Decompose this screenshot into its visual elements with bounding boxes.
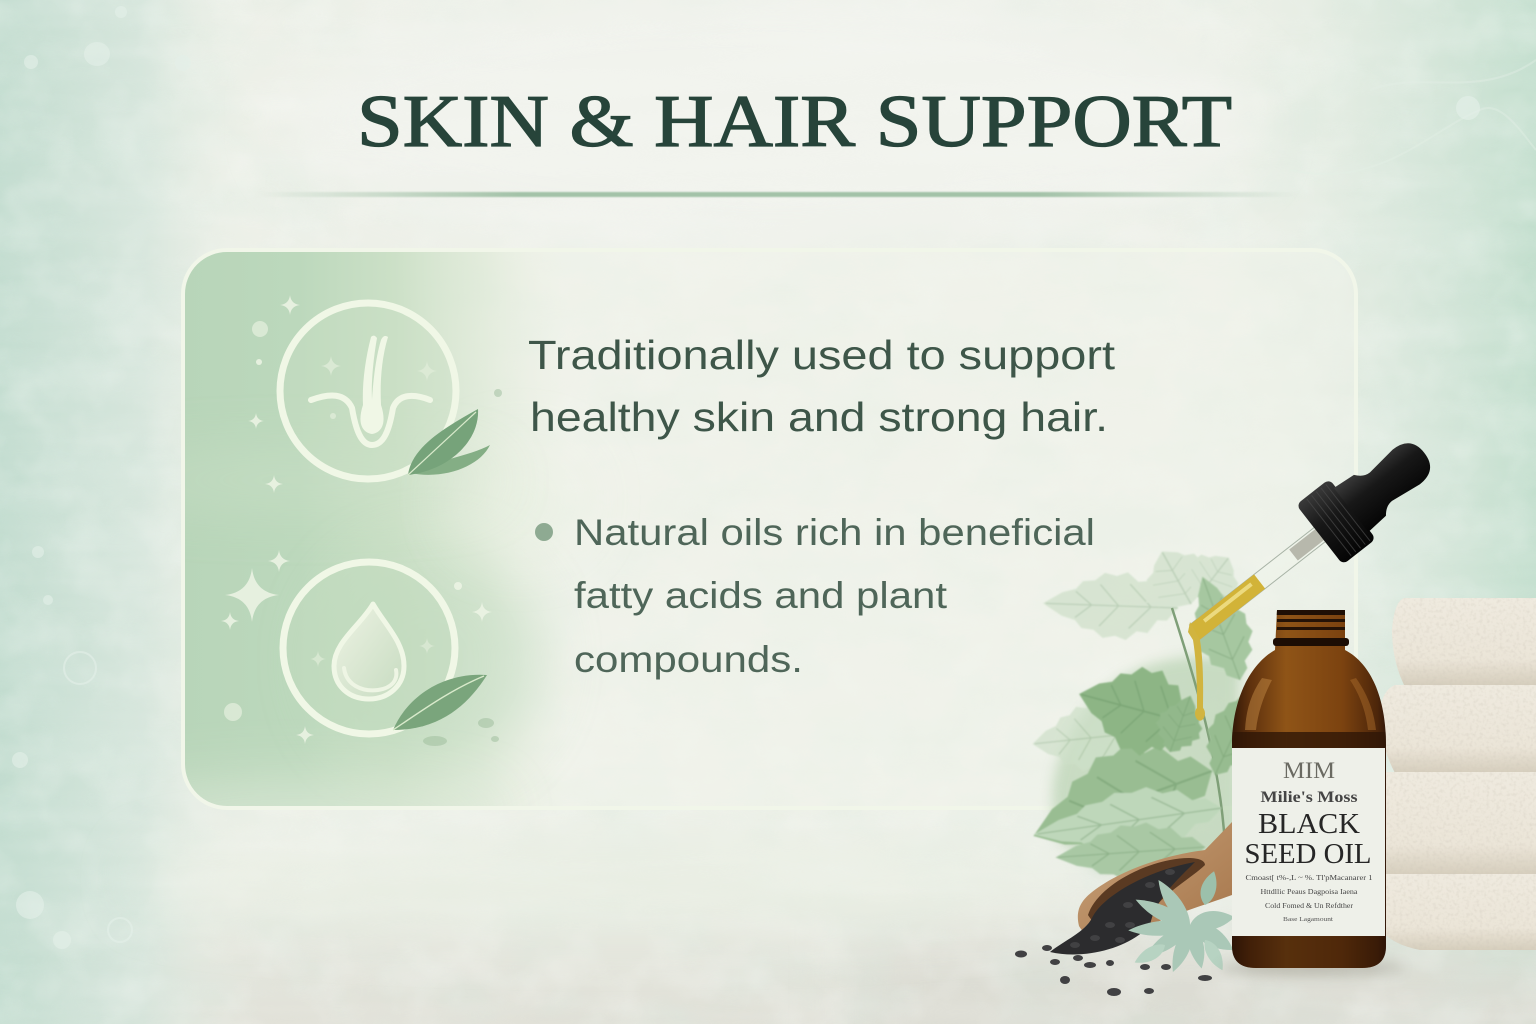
label text: Httdllic Peaus Dagpoisa Iaena [1260,887,1358,896]
illustration: herb plant [1015,533,1281,887]
label text [1244,758,1373,923]
bottle shadow [1220,961,1404,975]
illustration: amber bottle [1230,605,1390,976]
oil drip [1188,622,1205,721]
bullet point: fatty acids and plant [574,575,948,616]
lead text [528,332,1116,440]
icon: leaves on hair icon [408,409,490,475]
lead text: healthy skin and strong hair. [530,394,1108,440]
label text: Milie's Moss [1260,789,1358,806]
label text: Cold Fomed & Un Refdther [1265,901,1354,910]
bullet point: compounds. [574,639,803,680]
label text: SEED OIL [1244,838,1372,870]
illustration: wooden scoop with black seeds [1015,822,1232,996]
label text: MIM [1283,758,1335,783]
label text: Base Lagamount [1283,917,1333,923]
bullet point: Natural oils rich in beneficial [574,512,1095,553]
illustration: sage sprig [1128,869,1238,975]
decorative sparkles and dots [221,295,502,746]
label text: Cmoast[ t%-,L ~ %. Tl'pMacanarer 1 [1246,873,1373,882]
lead text: Traditionally used to support [528,332,1116,378]
icon: hair follicle [280,303,490,479]
bottle label [1232,748,1385,936]
title: SKIN & HAIR SUPPORT [357,81,1232,163]
label text: BLACK [1258,808,1360,840]
title divider [258,192,1298,197]
bullet point [535,512,1095,680]
icon: leaf on drop icon [393,675,487,730]
icon: oil drop [283,562,487,734]
illustration: dropper with oil [1170,423,1448,721]
illustration: stacked towels [1380,598,1536,950]
panel: content card [181,248,1358,810]
